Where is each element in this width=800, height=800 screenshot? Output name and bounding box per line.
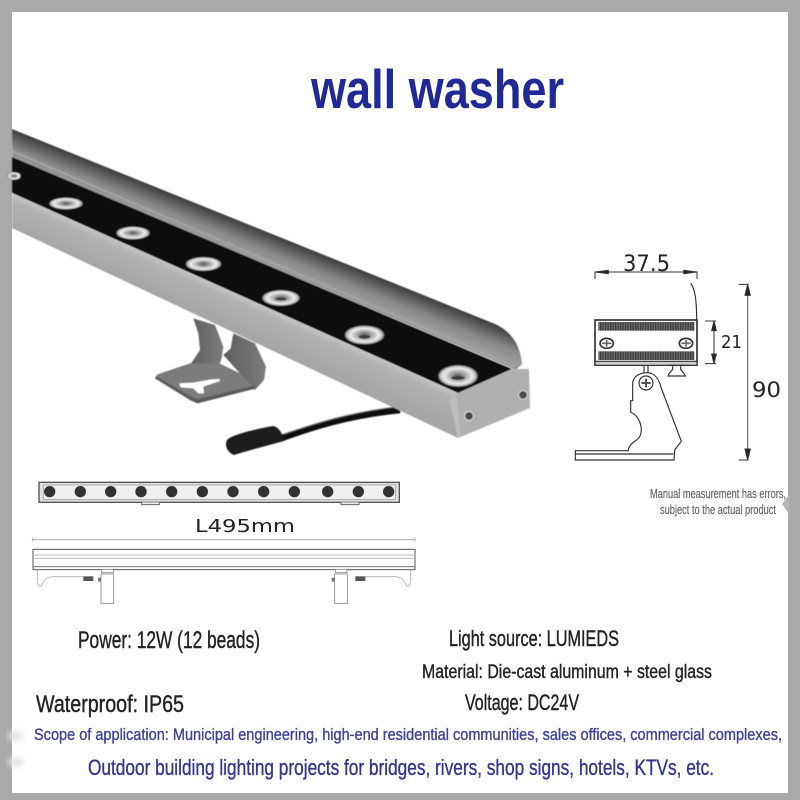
LED lenses: [7, 172, 478, 387]
end screw left: [464, 412, 474, 420]
product photo: LED wall washer bar: [7, 129, 530, 455]
power cable: [282, 410, 400, 438]
dimension lines and arrows: [595, 270, 750, 460]
end screw right: [518, 390, 528, 400]
spec: voltage: Voltage: DC24V: [465, 690, 579, 715]
side drawing linework: [575, 283, 697, 460]
spec: waterproof: Waterproof: IP65: [36, 691, 184, 718]
mounting bracket: [155, 318, 266, 403]
dimension 90: 90: [752, 378, 781, 402]
side dimension drawing: [575, 252, 781, 460]
dimension 21: 21: [721, 332, 742, 353]
spec: material: Material: Die-cast aluminum + steel glass: [422, 661, 712, 683]
cable connector: [226, 426, 284, 455]
measurement note: [650, 487, 786, 517]
edge artefact: right notch: [782, 495, 789, 514]
length label: L495mm: [195, 516, 295, 537]
dimension 37.5: 37.5: [623, 252, 670, 277]
black LED channel: [12, 157, 512, 393]
bar upper housing: [12, 129, 522, 370]
housing edge highlight: [12, 151, 514, 366]
cable highlight: [284, 407, 396, 434]
spec: light source: Light source: LUMIEDS: [449, 626, 619, 651]
top view drawing with 12 beads: [39, 482, 399, 505]
bar end face: [450, 369, 530, 438]
end face shading: [450, 396, 461, 438]
spec: power: Power: 12W (12 beads): [78, 627, 260, 654]
title: wall washer: [310, 58, 564, 120]
bar front side face: [12, 193, 458, 438]
side view drawing: [32, 538, 415, 603]
edge artefacts: left smudges: [8, 731, 24, 767]
